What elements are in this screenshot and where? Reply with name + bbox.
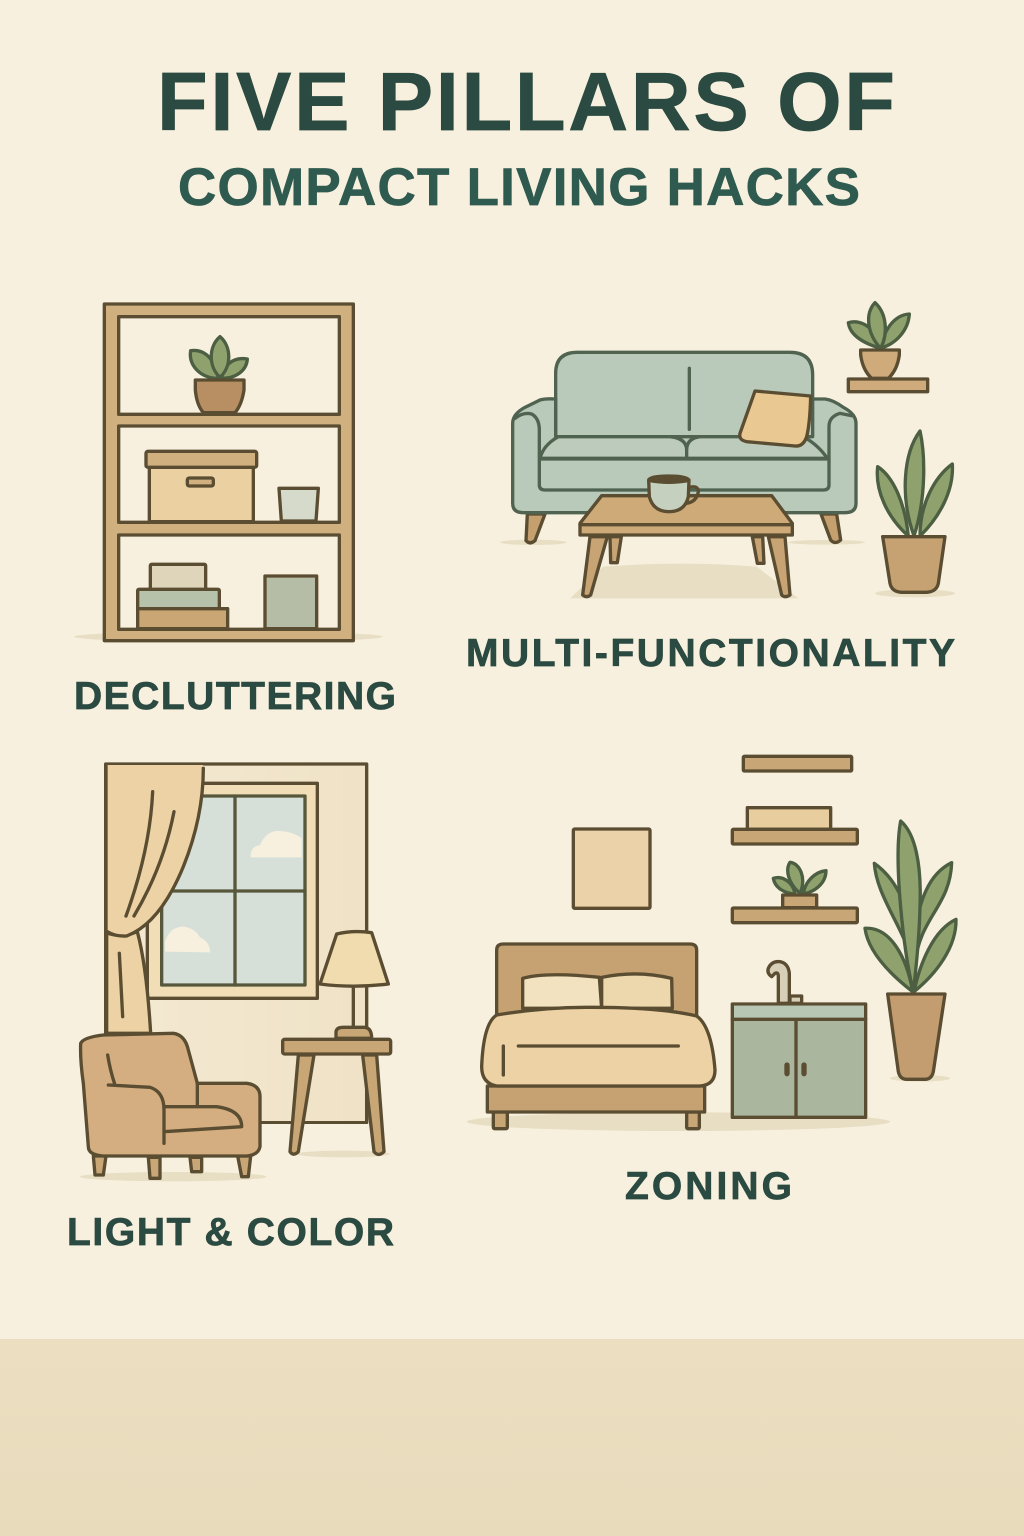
icon: armchair [81,1033,260,1178]
icon: wall shelf plant [848,303,928,392]
panel: zoning [467,756,956,1208]
icon: kitchen sink cabinet [732,962,866,1117]
icon: cushion [740,391,811,446]
icon: tall plant [865,821,956,1079]
icon: bookshelf [74,304,383,642]
icon: lamp [320,932,388,1038]
icon: stacked books [138,564,228,629]
title: FIVE PILLARS OF [157,55,895,148]
panel: light and color [67,764,394,1254]
icon: reading corner [80,764,391,1181]
icon: storage box [146,451,257,522]
panel: decluttering [74,304,396,718]
icon: living room [500,303,955,598]
icon: wall shelves [732,756,857,923]
icon: studio room [467,756,956,1131]
panel: multi-functionality [466,303,955,675]
icon: cup [279,488,318,521]
label: DECLUTTERING [74,675,396,718]
icon: floor plant [877,431,952,592]
wall [106,764,367,1123]
label: MULTI-FUNCTIONALITY [466,632,955,675]
icon: bed [482,944,715,1129]
icon: sofa [513,352,856,543]
icon: potted plant on shelf [190,337,247,413]
icon: cup [649,476,698,512]
icon: side table [283,1039,391,1154]
icon: window [147,783,317,998]
icon: picture [573,829,650,908]
icon: coffee table [580,496,792,597]
icon: box file [265,576,317,629]
icon: curtain [106,765,203,1033]
subtitle: COMPACT LIVING HACKS [178,158,860,217]
label: ZONING [625,1165,792,1208]
label: LIGHT & COLOR [67,1211,394,1254]
floor band [0,1339,1024,1536]
